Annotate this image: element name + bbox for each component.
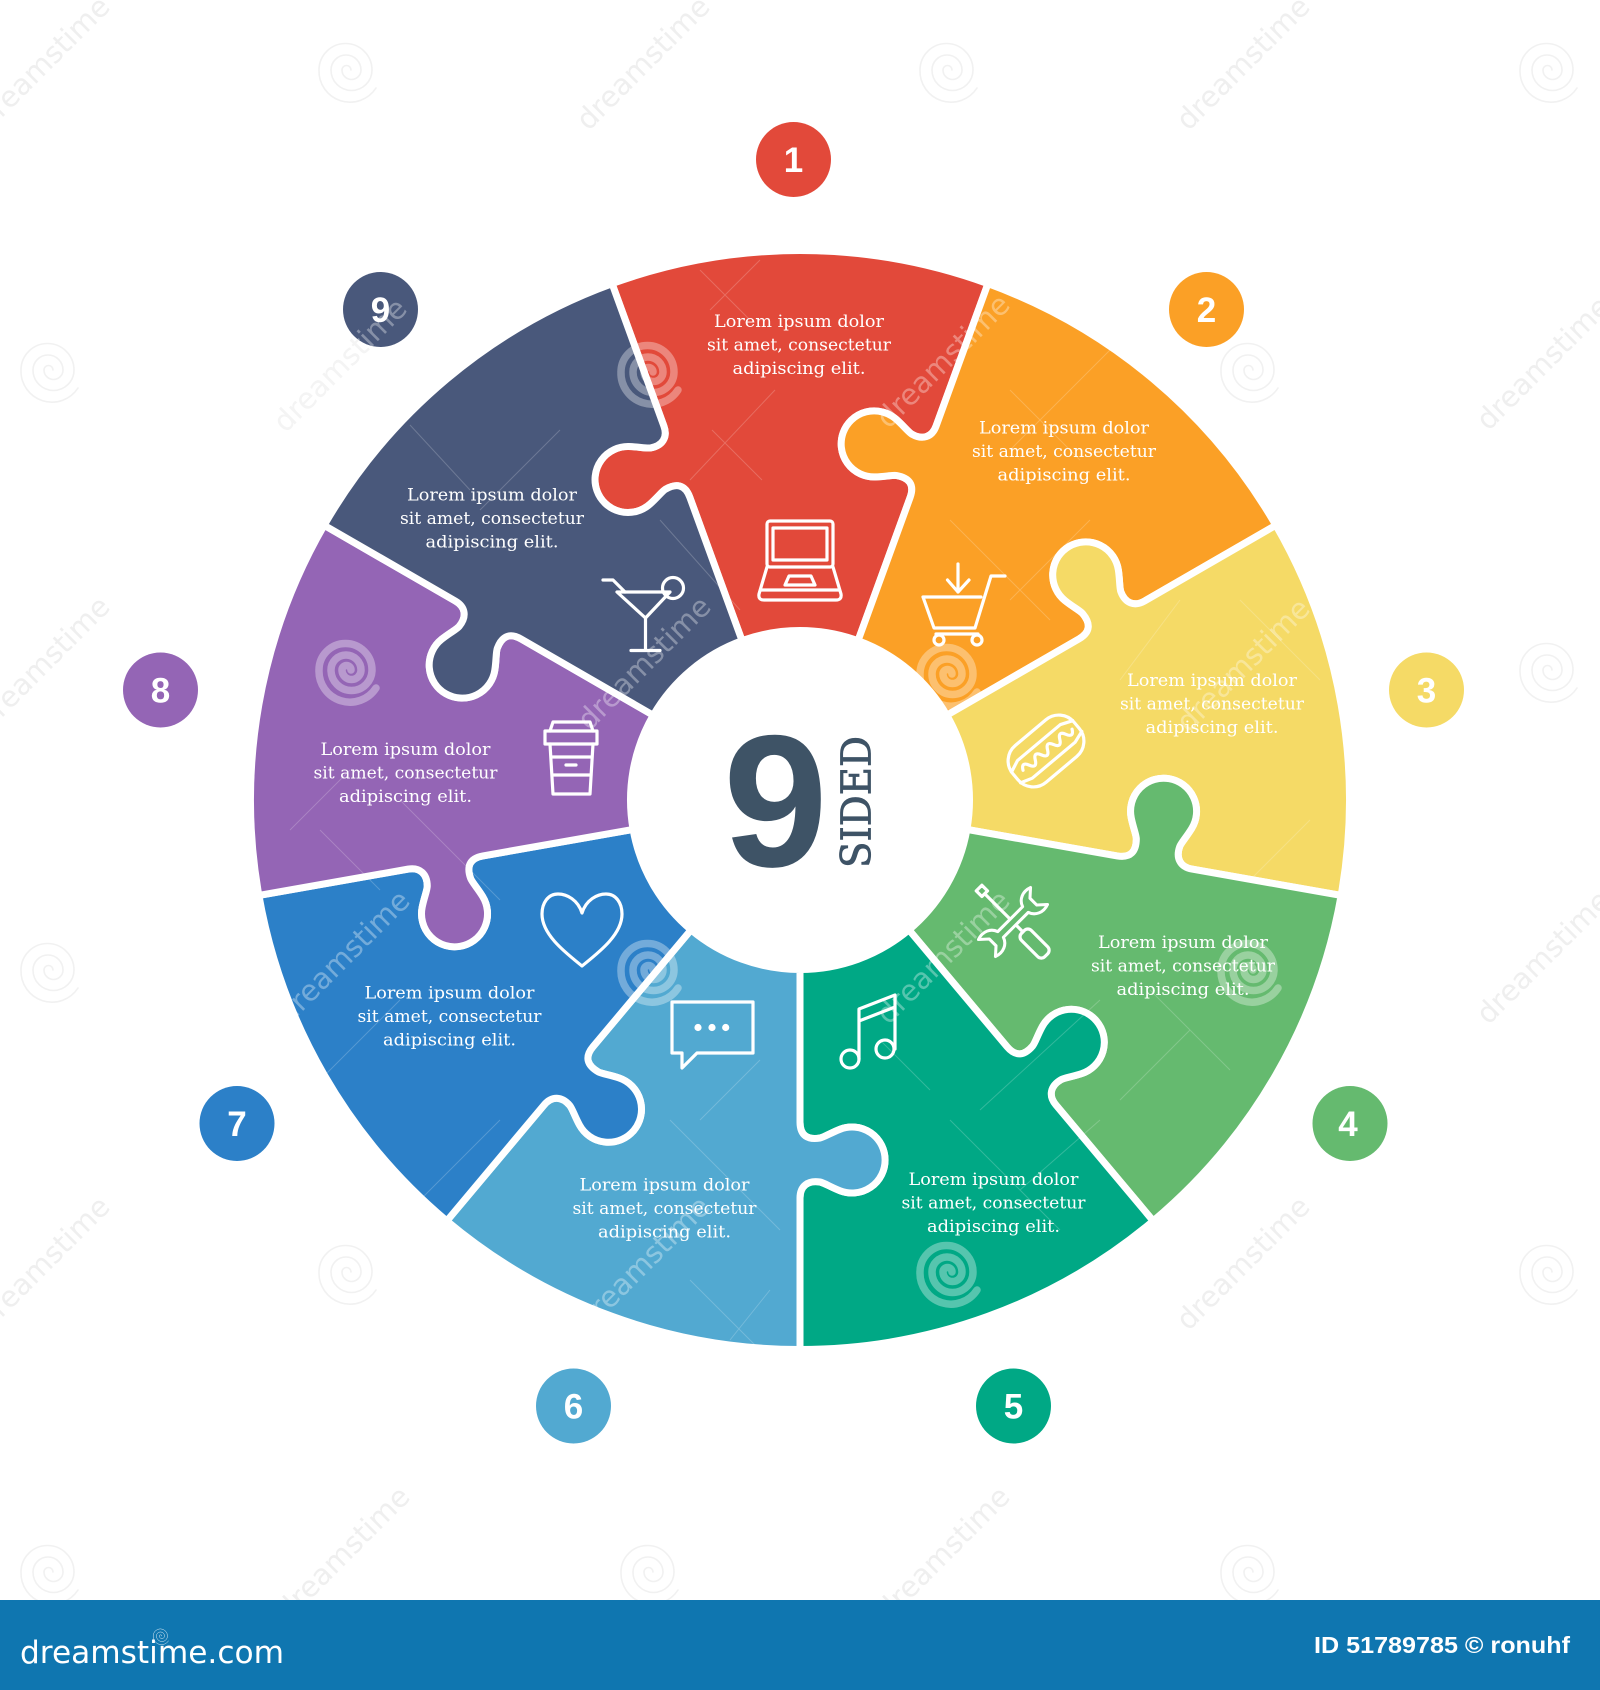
text block 6: Lorem ipsum dolor — [580, 1176, 750, 1194]
icon: wrench and screwdriver — [974, 883, 1051, 960]
overlay watermark on the wheel — [266, 287, 1317, 1337]
text block 7 — [358, 984, 542, 1050]
overlay watermark on the wheel: dreamstime — [570, 589, 718, 737]
text block 3 — [1120, 671, 1304, 737]
text block 5: sit amet, consectetur — [902, 1194, 1086, 1212]
text block 1: adipiscing elit. — [732, 359, 866, 378]
text block 1: Lorem ipsum dolor — [714, 312, 884, 331]
panel 5: teal puzzle piece — [613, 845, 1218, 1448]
number badge 1 — [756, 122, 831, 197]
text block 8 — [314, 740, 498, 806]
number badge 1: 1 — [784, 141, 803, 180]
text block 5 — [902, 1170, 1086, 1236]
text block 2: adipiscing elit. — [998, 466, 1130, 484]
number badge 4: 4 — [1338, 1105, 1358, 1144]
number badge 8 — [123, 652, 198, 728]
text block 1 — [707, 312, 891, 378]
panel 9: navy puzzle piece — [282, 219, 864, 809]
text block 4: Lorem ipsum dolor — [1098, 933, 1268, 952]
number badge 5 — [976, 1368, 1051, 1444]
number badge 7 — [200, 1086, 274, 1161]
text block 3: sit amet, consectetur — [1120, 694, 1304, 714]
number badge 3: 3 — [1417, 672, 1436, 710]
text block 5: Lorem ipsum dolor — [908, 1170, 1079, 1189]
number badge 9 — [343, 272, 418, 347]
number badge 4 — [1312, 1086, 1388, 1161]
icon: shopping cart — [923, 564, 1005, 645]
text block 6: sit amet, consectetur — [572, 1199, 757, 1218]
overlay watermark on the wheel: dreamstime — [569, 1189, 717, 1337]
panel 4: green puzzle piece — [866, 739, 1356, 1243]
text block 6: adipiscing elit. — [598, 1222, 731, 1242]
panel 2: orange puzzle piece — [764, 255, 1320, 799]
text block 9 — [400, 486, 584, 552]
icon: laptop — [759, 521, 841, 600]
number badge 6: 6 — [564, 1388, 583, 1426]
panel 3: yellow puzzle piece — [870, 452, 1452, 1041]
text block 4 — [1091, 933, 1275, 999]
text block 3: adipiscing elit. — [1146, 718, 1278, 737]
text block 4: sit amet, consectetur — [1091, 956, 1275, 976]
footer logo: dreamstime.com — [20, 1635, 284, 1671]
footer bar — [0, 1600, 1600, 1690]
panel 8: purple puzzle piece — [198, 475, 687, 979]
icon: hot dog — [1000, 707, 1092, 795]
number badge 9: 9 — [371, 291, 390, 330]
number badge 3 — [1389, 652, 1464, 728]
text block 7: Lorem ipsum dolor — [364, 984, 535, 1002]
text block 5: adipiscing elit. — [927, 1217, 1060, 1236]
icon: coffee cup — [545, 722, 597, 794]
panel 6: light blue puzzle piece — [447, 930, 885, 1350]
text block 2: sit amet, consectetur — [972, 442, 1156, 461]
centre label: 9 sided — [723, 696, 880, 906]
footer image id and credit: ID 51789785 © ronuhf — [1314, 1632, 1570, 1658]
text block 8: Lorem ipsum dolor — [320, 740, 491, 759]
text block 6 — [572, 1176, 757, 1242]
text block 2 — [972, 418, 1156, 484]
overlay watermark on the wheel: dreamstime — [869, 883, 1017, 1031]
text block 9: sit amet, consectetur — [400, 509, 584, 528]
centre label: 9 sided: SIDED — [832, 736, 880, 868]
text block 3: Lorem ipsum dolor — [1127, 671, 1297, 690]
number badge 2 — [1169, 272, 1244, 347]
overlay watermark on the wheel: dreamstime — [869, 287, 1017, 435]
text block 2: Lorem ipsum dolor — [979, 418, 1149, 438]
number badge 8: 8 — [151, 672, 170, 710]
icon: music notes — [841, 995, 895, 1068]
background watermark pattern: dreamstime — [1169, 1189, 1317, 1337]
overlay watermark on the wheel: dreamstime — [266, 291, 414, 439]
number badge 7: 7 — [227, 1105, 247, 1144]
text block 4: adipiscing elit. — [1116, 980, 1250, 999]
panel 7: blue puzzle piece — [176, 672, 782, 1276]
number badge 5: 5 — [1004, 1388, 1023, 1426]
number badge 6 — [536, 1368, 611, 1444]
centre label: 9 sided: 9 — [723, 696, 828, 906]
overlay watermark on the wheel: dreamstime — [1169, 591, 1317, 739]
icon: heart — [542, 894, 622, 966]
text block 7: adipiscing elit. — [383, 1030, 516, 1050]
icon: speech bubble — [672, 1002, 753, 1068]
text block 1: sit amet, consectetur — [707, 336, 891, 354]
text block 7: sit amet, consectetur — [358, 1007, 542, 1026]
text block 9: adipiscing elit. — [426, 532, 558, 552]
overlay watermark cross lines — [290, 260, 1320, 1350]
background watermark pattern: dreamstime — [269, 1479, 417, 1627]
text block 8: adipiscing elit. — [339, 787, 472, 806]
background watermark pattern: dreamstime — [266, 291, 414, 439]
icon: cocktail glass — [603, 578, 684, 650]
background watermark pattern: dreamstime — [869, 1479, 1017, 1627]
text block 9: Lorem ipsum dolor — [407, 486, 577, 504]
panel 1: red puzzle piece — [532, 163, 1088, 707]
number badge 2: 2 — [1197, 291, 1216, 330]
overlay watermark on the wheel: dreamstime — [269, 883, 417, 1031]
text block 8: sit amet, consectetur — [314, 764, 498, 782]
